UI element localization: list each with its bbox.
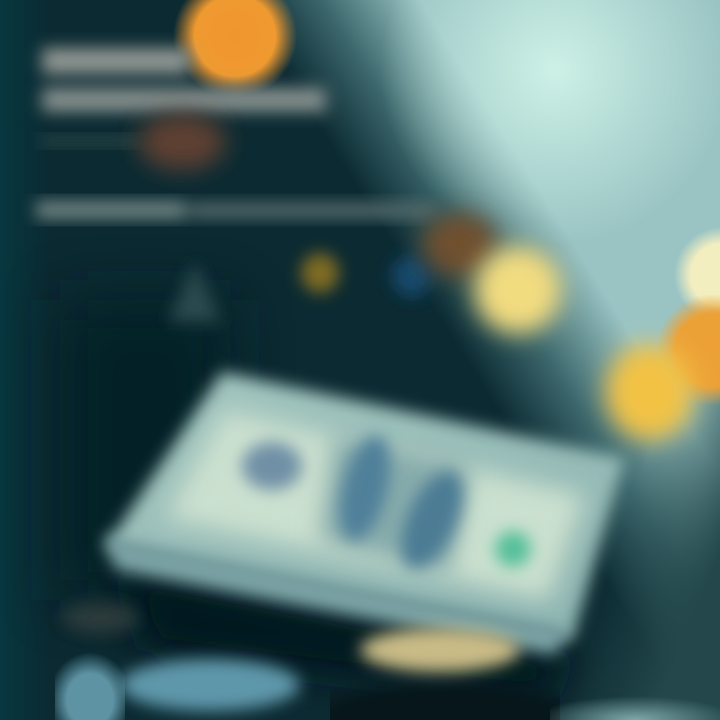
coin: blue left column: [55, 640, 125, 720]
banknote: [105, 372, 625, 700]
heading: [42, 48, 326, 112]
coin: pale bottom right: [550, 680, 720, 720]
icon: grey triangle: [168, 262, 222, 322]
text block: small caption: [40, 136, 140, 146]
note inner panel: [165, 410, 585, 600]
note body: [105, 372, 625, 640]
note lower edge: [105, 535, 570, 655]
note green seal: [495, 531, 531, 567]
coin: gold at bottom: [360, 628, 520, 672]
text block: subtitle: [36, 201, 435, 219]
coin: orange right: [650, 290, 720, 410]
note portrait right: [389, 463, 475, 577]
coin: yellow stack: [606, 344, 694, 440]
note shadow: [120, 570, 570, 700]
coin: pale right: [660, 220, 720, 330]
coin: blue at bottom: [120, 659, 300, 711]
icon: brown blob: [138, 114, 226, 170]
coin: yellow: [474, 246, 562, 334]
shadow: under gold coin: [330, 665, 560, 720]
note left seal: [242, 442, 302, 490]
note centre band: [320, 435, 470, 575]
icon: blue marker: [392, 255, 432, 297]
note portrait left: [331, 430, 399, 546]
icon: yellow marker: [301, 253, 339, 293]
coin: brown: [422, 213, 498, 277]
icon: orange drop: [170, 0, 300, 100]
coin: dark rim: [62, 602, 138, 634]
